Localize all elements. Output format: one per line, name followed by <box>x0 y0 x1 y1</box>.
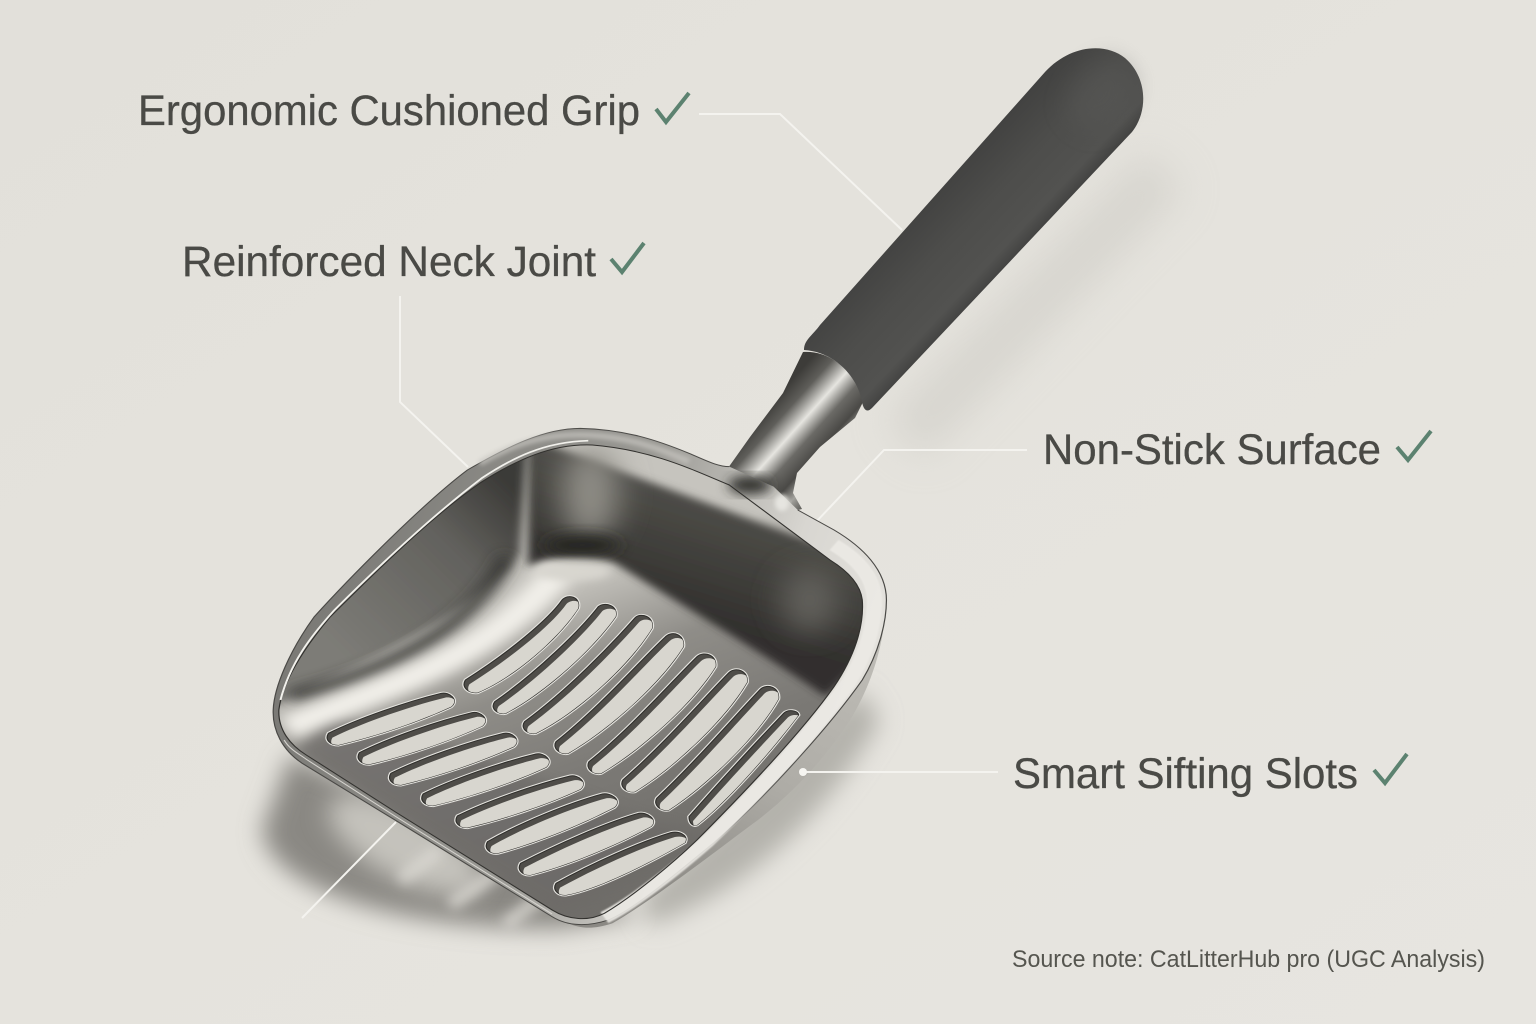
left rim white line <box>280 441 588 700</box>
leader line: ergonomic grip <box>699 114 902 230</box>
sifting slots <box>327 597 803 899</box>
leader dot <box>799 768 807 776</box>
dark crescent <box>290 557 508 697</box>
wall highlights <box>562 447 619 540</box>
leader line: reinforced neck joint <box>400 296 468 467</box>
front lip line <box>284 740 552 914</box>
leader line: non-stick surface <box>816 450 1027 522</box>
scoop handle and neck <box>700 48 1146 512</box>
label text: Smart Sifting Slots <box>1013 750 1358 798</box>
neck base blend <box>728 476 789 511</box>
front floor shade <box>294 717 605 860</box>
cushioned grip <box>804 48 1143 410</box>
rim highlight top <box>480 435 689 463</box>
icon: check mark <box>1397 431 1431 460</box>
icon: check mark <box>611 243 644 272</box>
scoop head <box>266 420 902 940</box>
callout: Non-Stick Surface <box>1043 426 1431 474</box>
callout: Reinforced Neck Joint <box>182 238 644 286</box>
back wall <box>528 437 878 697</box>
cavity outline <box>279 445 863 919</box>
handle shadow <box>905 170 1165 440</box>
scoop cast shadow <box>262 690 880 928</box>
outer rim <box>273 428 886 925</box>
callout: Ergonomic Cushioned Grip <box>138 87 689 135</box>
right rim highlight <box>604 545 875 918</box>
label text: Reinforced Neck Joint <box>182 238 596 286</box>
left wall <box>280 457 531 708</box>
callout: Smart Sifting Slots <box>799 750 1407 798</box>
bright crescent <box>286 570 560 728</box>
label text: Ergonomic Cushioned Grip <box>138 87 640 135</box>
metal neck <box>700 352 864 512</box>
label text: Non-Stick Surface <box>1043 426 1381 474</box>
scoop underside <box>568 600 886 928</box>
rim outline <box>273 428 886 925</box>
icon: check mark <box>1374 754 1407 783</box>
source note: Source note: CatLitterHub pro (UGC Analysis) <box>1012 946 1485 973</box>
icon: check mark <box>656 93 689 122</box>
leader line: bottom-left <box>302 822 396 918</box>
scoop cavity <box>279 445 862 918</box>
leader line with dot <box>803 771 998 773</box>
